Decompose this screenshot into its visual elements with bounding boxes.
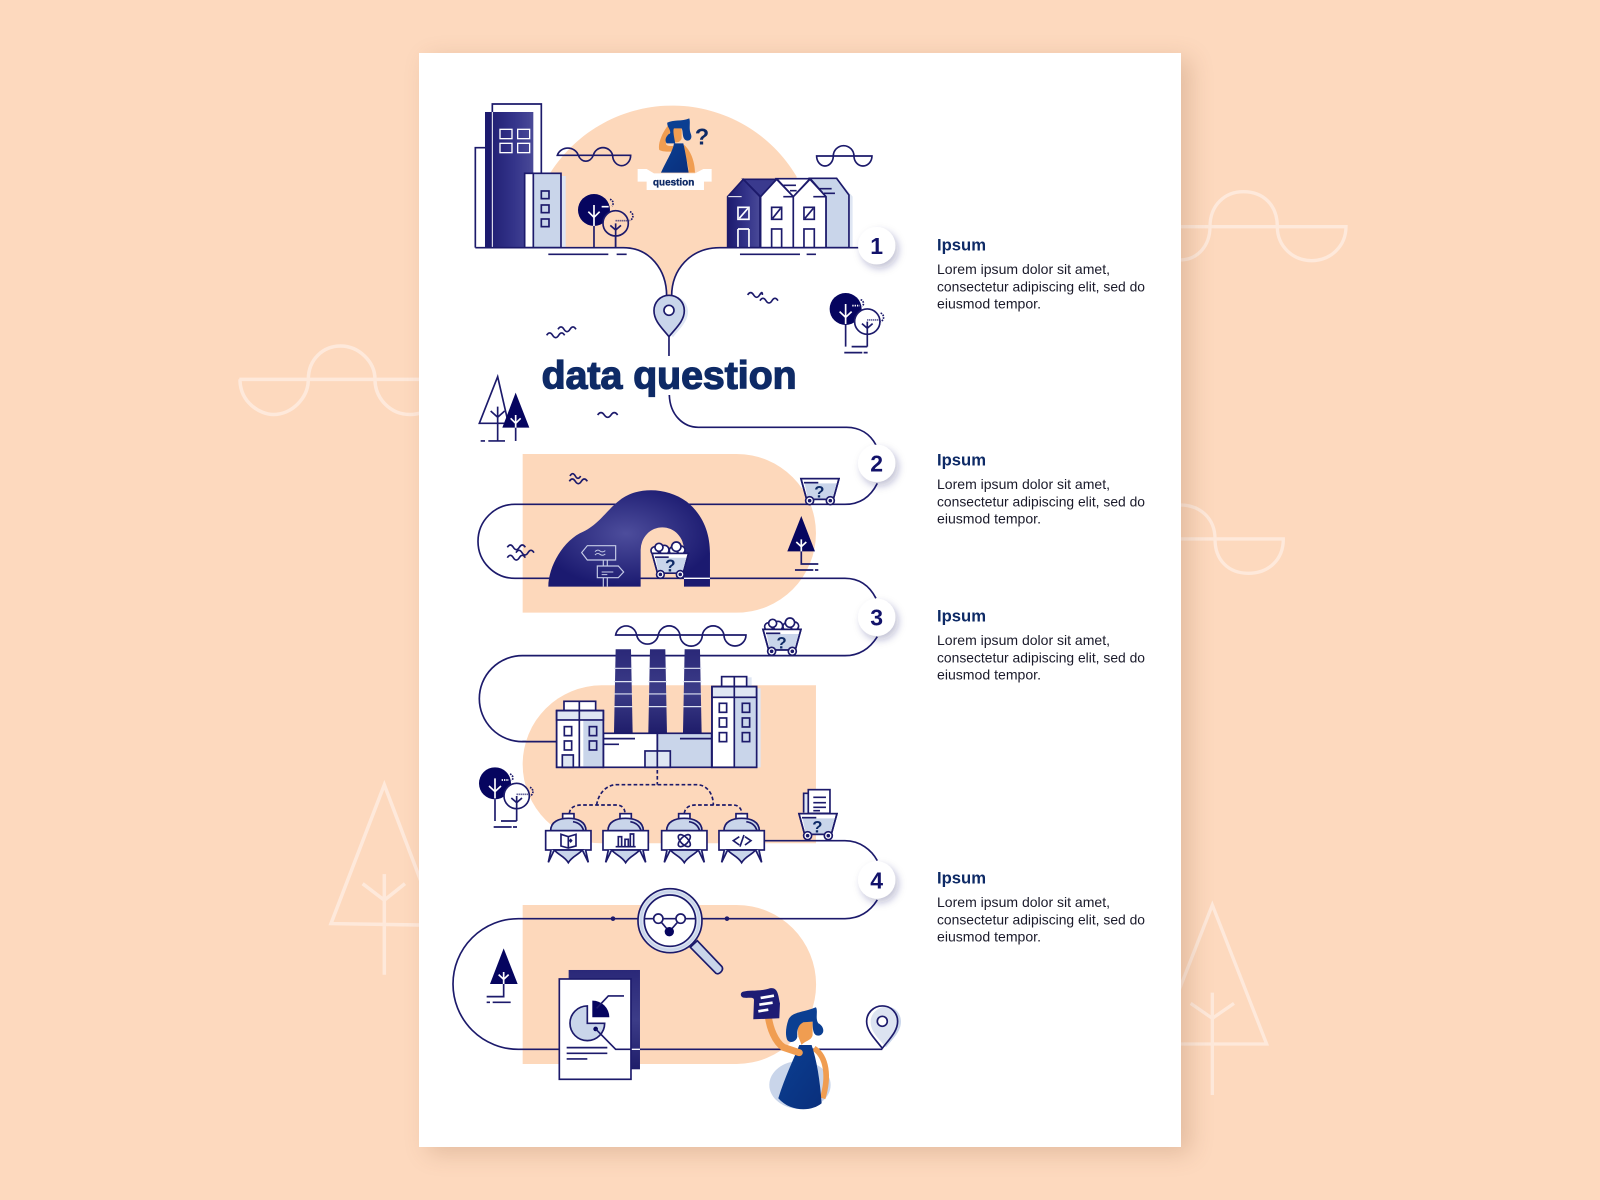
text block: step 4: consectetur adipiscing elit, sed do bbox=[937, 912, 1145, 927]
icon: factory hall bbox=[603, 733, 712, 767]
icon: end tree bbox=[487, 948, 518, 1002]
text block: step 4: Lorem ipsum dolor sit amet, bbox=[937, 895, 1110, 910]
badge 1 bbox=[858, 227, 895, 264]
question mark: ? bbox=[695, 123, 709, 149]
peach block bbox=[523, 905, 816, 1064]
dashed branching bbox=[569, 770, 742, 813]
text block: step 1 bbox=[937, 236, 1145, 312]
text block: step 1: eiusmod tempor. bbox=[937, 297, 1041, 312]
panel: step 3 tanks and step 4 analysis bbox=[453, 767, 901, 1109]
badge 2: 2 bbox=[870, 451, 883, 477]
squiggles bbox=[547, 293, 778, 417]
icon: end pin bbox=[867, 1006, 901, 1048]
text block: step 3: consectetur adipiscing elit, sed do bbox=[937, 650, 1145, 665]
white poster sheet bbox=[419, 53, 1181, 1147]
icon: row of houses bbox=[728, 178, 853, 248]
badge 1: 1 bbox=[870, 233, 883, 259]
icon: cart in tunnel: ? bbox=[665, 556, 676, 576]
icon: cart in tunnel bbox=[651, 542, 689, 578]
badge 2 bbox=[858, 445, 895, 482]
icon: tree pair right bbox=[830, 293, 884, 353]
road: title to step 2 bbox=[669, 395, 876, 445]
icon: tree bbox=[787, 516, 818, 570]
icon: right building bbox=[712, 677, 761, 767]
road: ground split into pin bbox=[475, 248, 862, 296]
wave: smoke bbox=[616, 626, 746, 646]
text block: step 3 bbox=[937, 608, 1145, 683]
icon: report document bbox=[559, 970, 640, 1079]
icon: cart with document: ? bbox=[812, 818, 822, 837]
text block: step 4: eiusmod tempor. bbox=[937, 930, 1041, 945]
text block: step 2 bbox=[937, 452, 1145, 527]
text block: step 2: eiusmod tempor. bbox=[937, 512, 1041, 527]
peach block bbox=[523, 454, 816, 613]
icon: tree pair on ground bbox=[578, 194, 633, 248]
re-drawn road over peach bbox=[522, 739, 557, 744]
icon: magnifying glass bbox=[638, 889, 722, 974]
text block: step 1: Lorem ipsum dolor sit amet, bbox=[937, 262, 1110, 277]
text block: step 1: Ipsum bbox=[937, 236, 986, 254]
road: step 3 track bbox=[479, 637, 877, 742]
icon: tunnel mountain bbox=[548, 490, 710, 587]
text block: step 1: consectetur adipiscing elit, sed do bbox=[937, 279, 1145, 294]
icon: tree pair lower left bbox=[479, 767, 533, 827]
peach block bbox=[523, 685, 816, 843]
wave left bbox=[557, 148, 631, 166]
title: data question bbox=[542, 353, 797, 397]
squiggles bbox=[507, 474, 587, 560]
badge 4 bbox=[858, 861, 895, 899]
icon: triangle trees bbox=[479, 377, 529, 441]
peach dome bbox=[550, 106, 797, 295]
text block: step 3: Ipsum bbox=[937, 608, 986, 626]
icon: tank book bbox=[546, 814, 591, 863]
ground dashes bbox=[548, 252, 816, 257]
person: woman holding result bbox=[741, 988, 831, 1109]
panel: step 1 city and question bbox=[475, 104, 884, 445]
icon: tall office buildings bbox=[475, 104, 566, 248]
icon: location pin bbox=[654, 295, 688, 356]
banner: question bbox=[638, 169, 712, 190]
text block: step 2: consectetur adipiscing elit, sed do bbox=[937, 494, 1145, 509]
text block: step 3: Lorem ipsum dolor sit amet, bbox=[937, 633, 1110, 648]
banner: question: question bbox=[653, 177, 694, 188]
road: tank to step 4 bbox=[764, 841, 877, 861]
text block: step 2: Ipsum bbox=[937, 452, 986, 470]
icon: cart with rocks: ? bbox=[777, 633, 787, 652]
icon: cart on track bbox=[801, 479, 839, 505]
icon: signposts bbox=[582, 546, 624, 587]
wave right bbox=[817, 146, 872, 166]
icon: chimney stacks bbox=[614, 649, 702, 733]
icon: left building bbox=[557, 701, 603, 767]
dots on track bbox=[611, 916, 729, 921]
road: final track bbox=[453, 900, 882, 1049]
text block: step 2: Lorem ipsum dolor sit amet, bbox=[937, 477, 1110, 492]
icon: tank atom bbox=[662, 814, 707, 863]
badge 3: 3 bbox=[870, 605, 883, 631]
badge 4: 4 bbox=[870, 867, 883, 893]
text block: step 3: eiusmod tempor. bbox=[937, 668, 1041, 683]
badge 3 bbox=[858, 599, 895, 636]
person: woman thinking bbox=[659, 118, 695, 173]
icon: tank code bbox=[719, 814, 764, 863]
text block: step 4: Ipsum bbox=[937, 870, 986, 888]
icon: cart with rocks bbox=[763, 618, 801, 655]
panel: step 2 mine bbox=[478, 454, 877, 843]
icon: cart on track: ? bbox=[814, 483, 824, 502]
icon: cart with document bbox=[799, 790, 837, 840]
road: track through mine bbox=[478, 483, 877, 598]
text block: step 4 bbox=[937, 870, 1145, 945]
icon: tank bars bbox=[603, 814, 648, 863]
